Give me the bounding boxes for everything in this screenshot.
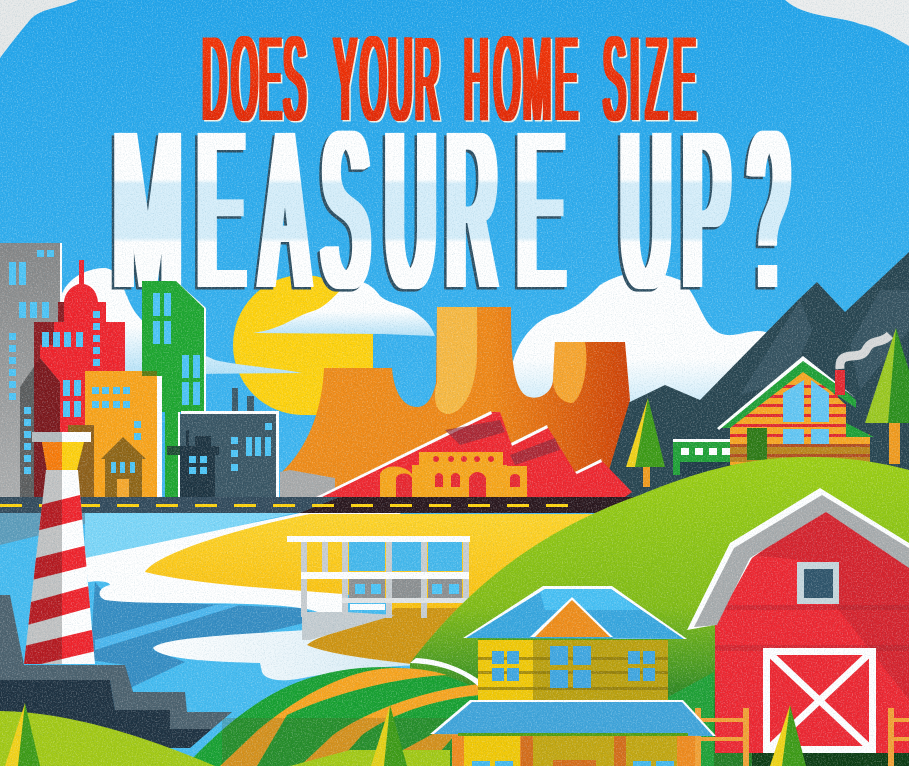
- cloud behind city: [60, 268, 302, 374]
- white river: [85, 513, 460, 680]
- sun: [233, 275, 373, 415]
- small brown house: [101, 437, 146, 497]
- mountains: [555, 252, 909, 510]
- title: first line: DOES YOUR HOME SIZE: [202, 11, 696, 146]
- mesa rock formation: [280, 307, 630, 500]
- road: [0, 497, 640, 513]
- red tower: [34, 260, 125, 497]
- green tower: [142, 281, 206, 497]
- log cabin: [717, 335, 890, 465]
- dark factory: [167, 388, 279, 497]
- sandy shore: [145, 514, 620, 664]
- title: second line: M: [114, 85, 181, 335]
- barn: [687, 488, 909, 766]
- barn loft window: [797, 562, 839, 604]
- large green hill: [410, 457, 909, 766]
- cloud over sun: [252, 281, 435, 336]
- adobe building: [380, 452, 527, 497]
- front tree by barn: [770, 705, 806, 766]
- left bottom tree: [5, 703, 40, 766]
- large right cloud: [511, 272, 768, 430]
- beach house on stilts: [287, 536, 470, 640]
- fences: [695, 708, 909, 766]
- middle bottom tree: [371, 705, 407, 766]
- upper roof: [463, 586, 687, 639]
- left tree by mountain: [626, 398, 665, 487]
- farmhouse: [430, 586, 716, 766]
- bottom strip of grass: [290, 750, 450, 766]
- corner clouds: [0, 0, 909, 58]
- title: second line: EASURE UP?: [199, 85, 787, 336]
- barn door: [763, 648, 876, 753]
- small green building: [673, 439, 733, 476]
- gray tower: [0, 243, 62, 497]
- bottom left hill: [0, 711, 215, 766]
- striped fields: [185, 658, 482, 766]
- lower storey: [452, 733, 695, 766]
- red hills with adobe building: [316, 411, 632, 497]
- chimney smoke: [840, 335, 890, 369]
- lighthouse: [24, 432, 95, 664]
- upper storey: [478, 635, 668, 702]
- right tall tree: [865, 328, 909, 464]
- water: [0, 513, 480, 766]
- green patch right of house: [668, 672, 714, 766]
- stepped rocks: [0, 595, 232, 748]
- dark gable building: [20, 358, 60, 497]
- lower roof: [430, 700, 716, 736]
- chimney: [835, 370, 845, 395]
- orange building: [68, 371, 162, 497]
- city skyline: [0, 243, 279, 497]
